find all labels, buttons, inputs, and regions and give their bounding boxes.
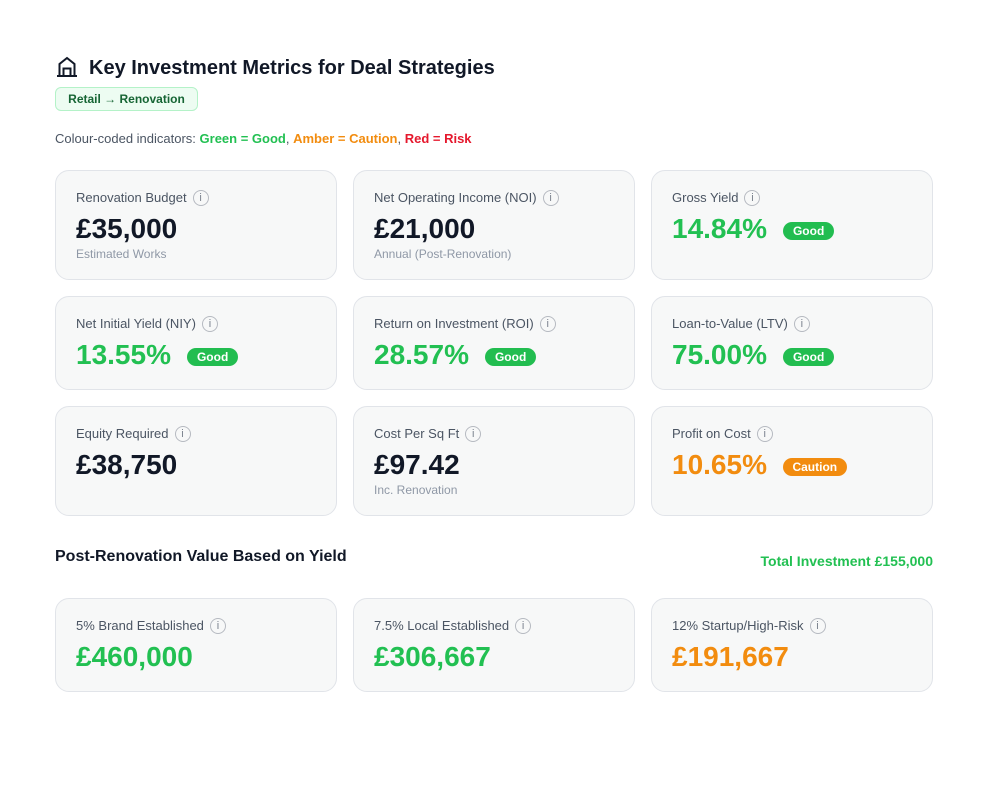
section heading: Post-Renovation Value Based on Yield: [55, 548, 347, 565]
panel: cost per sq ft: i: [472, 428, 474, 440]
panel: 7.5% local established: [353, 598, 635, 692]
panel: 7.5% local established: i: [522, 620, 524, 632]
panel: net initial yield: Good: [197, 350, 228, 364]
panel: 12% startup high-risk: [651, 598, 933, 692]
panel: gross yield: Good: [793, 224, 824, 238]
panel: loan to value: Loan-to-Value (LTV): [672, 316, 788, 331]
panel: renovation budget: £35,000: [76, 213, 177, 244]
panel: return on investment: Return on Investment (ROI): [374, 316, 534, 331]
panel: net initial yield: i: [209, 318, 211, 330]
panel: 7.5% local established: £306,667: [374, 641, 491, 672]
panel: equity required: [55, 406, 337, 516]
panel: profit on cost: Caution: [792, 460, 837, 474]
strategy tag: Retail → Renovation: [68, 92, 185, 106]
panel: loan to value: [651, 296, 933, 390]
panel: gross yield: i: [751, 192, 754, 204]
panel: net operating income: Net Operating Income (NOI): [374, 190, 537, 205]
panel: renovation budget: Estimated Works: [76, 247, 166, 261]
panel: gross yield: [651, 170, 933, 280]
panel: return on investment: Good: [495, 350, 526, 364]
panel: 12% startup high-risk: i: [816, 620, 819, 632]
panel: loan to value: Good: [793, 350, 824, 364]
panel: loan to value: 75.00%: [672, 339, 767, 370]
panel: 7.5% local established: 7.5% Local Established: [374, 618, 509, 633]
panel: equity required: £38,750: [76, 449, 177, 480]
panel: 12% startup high-risk: £191,667: [672, 641, 789, 672]
panel: 5% brand established: [55, 598, 337, 692]
panel: loan to value: i: [801, 318, 803, 330]
panel: net operating income: [353, 170, 635, 280]
panel: cost per sq ft: Inc. Renovation: [374, 483, 457, 497]
panel: equity required: i: [181, 428, 184, 440]
panel: renovation budget: Renovation Budget: [76, 190, 187, 205]
panel: profit on cost: [651, 406, 933, 516]
panel: return on investment: [353, 296, 635, 390]
title: Key Investment Metrics for Deal Strategies: [89, 57, 495, 79]
panel: net operating income: Annual (Post-Renovation): [374, 247, 511, 261]
panel: return on investment: 28.57%: [374, 339, 469, 370]
panel: equity required: Equity Required: [76, 426, 168, 441]
panel: 5% brand established: i: [217, 620, 219, 632]
panel: net operating income: £21,000: [374, 213, 475, 244]
panel: 12% startup high-risk: 12% Startup/High-Risk: [672, 618, 804, 633]
panel: renovation budget: [55, 170, 337, 280]
panel: renovation budget: i: [199, 192, 202, 204]
panel: net initial yield: [55, 296, 337, 390]
panel: gross yield: 14.84%: [672, 213, 767, 244]
panel: cost per sq ft: [353, 406, 635, 516]
icon: house: [57, 56, 77, 77]
panel: cost per sq ft: £97.42: [374, 449, 460, 480]
panel: net initial yield: 13.55%: [76, 339, 171, 370]
panel: gross yield: Gross Yield: [672, 190, 738, 205]
panel: return on investment: i: [546, 318, 549, 330]
panel: profit on cost: 10.65%: [672, 449, 767, 480]
panel: cost per sq ft: Cost Per Sq Ft: [374, 426, 459, 441]
panel: profit on cost: i: [764, 428, 766, 440]
panel: 5% brand established: 5% Brand Established: [76, 618, 204, 633]
panel: net initial yield: Net Initial Yield (NIY): [76, 316, 196, 331]
panel: profit on cost: Profit on Cost: [672, 426, 751, 441]
total investment: Total Investment £155,000: [761, 553, 933, 569]
colour legend: Colour-coded indicators: Green = Good, Amber = Caution, Red = Risk: [55, 131, 472, 146]
panel: net operating income: i: [549, 192, 552, 204]
strategy tag: [55, 87, 198, 111]
panel: 5% brand established: £460,000: [76, 641, 193, 672]
